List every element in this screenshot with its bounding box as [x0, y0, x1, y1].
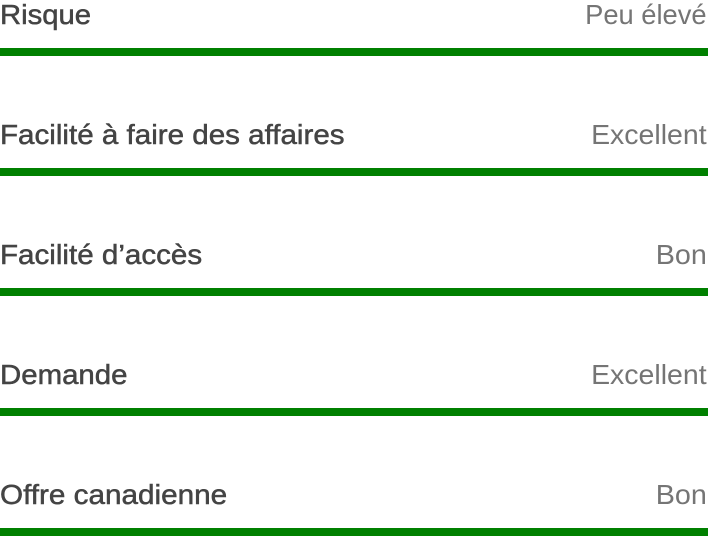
value: Bon: Bon: [656, 479, 707, 510]
row: Offre canadienne: [0, 479, 708, 536]
row: Facilité d'accès: [0, 239, 708, 296]
bar: Facilité à faire des affaires: [0, 168, 708, 176]
row: Facilité à faire des affaires: [0, 119, 708, 176]
label: Facilité à faire des affaires: Facilité à faire des affaires: [0, 119, 345, 150]
label: Offre canadienne: Offre canadienne: [0, 479, 227, 510]
label: Demande: Demande: [0, 359, 127, 390]
bar: Demande: [0, 408, 708, 416]
value: Excellent: Excellent: [591, 359, 707, 390]
value: Excellent: Excellent: [591, 119, 707, 150]
row: Risque: [0, 0, 708, 56]
value: Bon: Bon: [656, 239, 707, 270]
row: Demande: [0, 359, 708, 416]
label: Facilité d'accès: Facilité d’accès: [0, 239, 202, 270]
bar: Facilité d'accès: [0, 288, 708, 296]
bar: Risque: [0, 48, 708, 56]
bar: Offre canadienne: [0, 528, 708, 536]
